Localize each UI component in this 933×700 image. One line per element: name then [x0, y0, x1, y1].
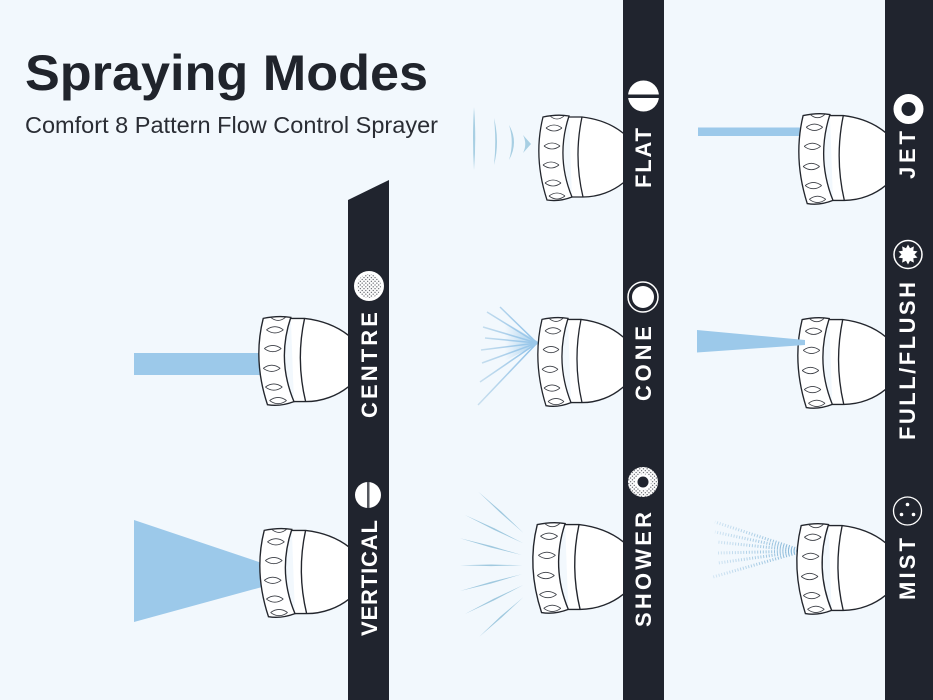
mode: jet spray and sprayer: [698, 114, 898, 204]
mode: full flush spray and sprayer: [697, 318, 898, 408]
label: shower: SHOWER: [631, 512, 656, 627]
icon: centre: [354, 271, 384, 301]
icon: vertical: [355, 482, 381, 508]
mode: vertical spray and sprayer: [134, 520, 362, 622]
spray: centre: [134, 353, 261, 375]
icon: jet: [898, 98, 920, 120]
label: full flush: FULL/FLUSH: [895, 282, 920, 440]
mode: centre spray and sprayer: [134, 317, 361, 405]
icon: full flush: [894, 240, 922, 268]
icon: cone: [628, 282, 658, 312]
sprayer head: [797, 524, 898, 614]
subtitle: Comfort 8 Pattern Flow Control Sprayer: [25, 112, 438, 138]
icon: mist: [894, 497, 922, 525]
title: Spraying Modes: [25, 45, 428, 101]
spray: shower: [460, 492, 523, 637]
mode: mist spray and sprayer: [713, 522, 898, 614]
bar: left column with slanted top: [348, 180, 389, 700]
mode: shower spray and sprayer: [460, 492, 636, 637]
spray: flat: [473, 107, 531, 170]
bar: right column: [885, 0, 933, 700]
sprayer head: [259, 317, 361, 405]
spray: mist: [713, 522, 803, 577]
label: jet: JET: [895, 130, 920, 179]
spray origin: [503, 322, 540, 362]
sprayer head: [799, 114, 898, 204]
mode: cone spray and sprayer: [478, 307, 634, 406]
label: centre: CENTRE: [357, 312, 382, 418]
spray: jet: [698, 128, 802, 136]
label: flat: FLAT: [631, 127, 656, 188]
label: mist: MIST: [895, 537, 920, 600]
icon: flat: [628, 80, 659, 112]
sprayer head: [533, 523, 636, 613]
bar: middle column: [623, 0, 664, 700]
label: cone: CONE: [631, 326, 656, 401]
label: vertical: VERTICAL: [357, 520, 382, 636]
sprayer head: [798, 318, 898, 408]
spray: cone: [478, 307, 537, 405]
icon: shower: [628, 467, 658, 497]
spray: full flush: [697, 330, 805, 352]
mode: flat spray and sprayer: [473, 107, 635, 201]
sprayer head: [538, 318, 634, 406]
sprayer head: [539, 115, 635, 201]
spray: vertical: [134, 520, 262, 622]
sprayer head: [260, 529, 362, 617]
